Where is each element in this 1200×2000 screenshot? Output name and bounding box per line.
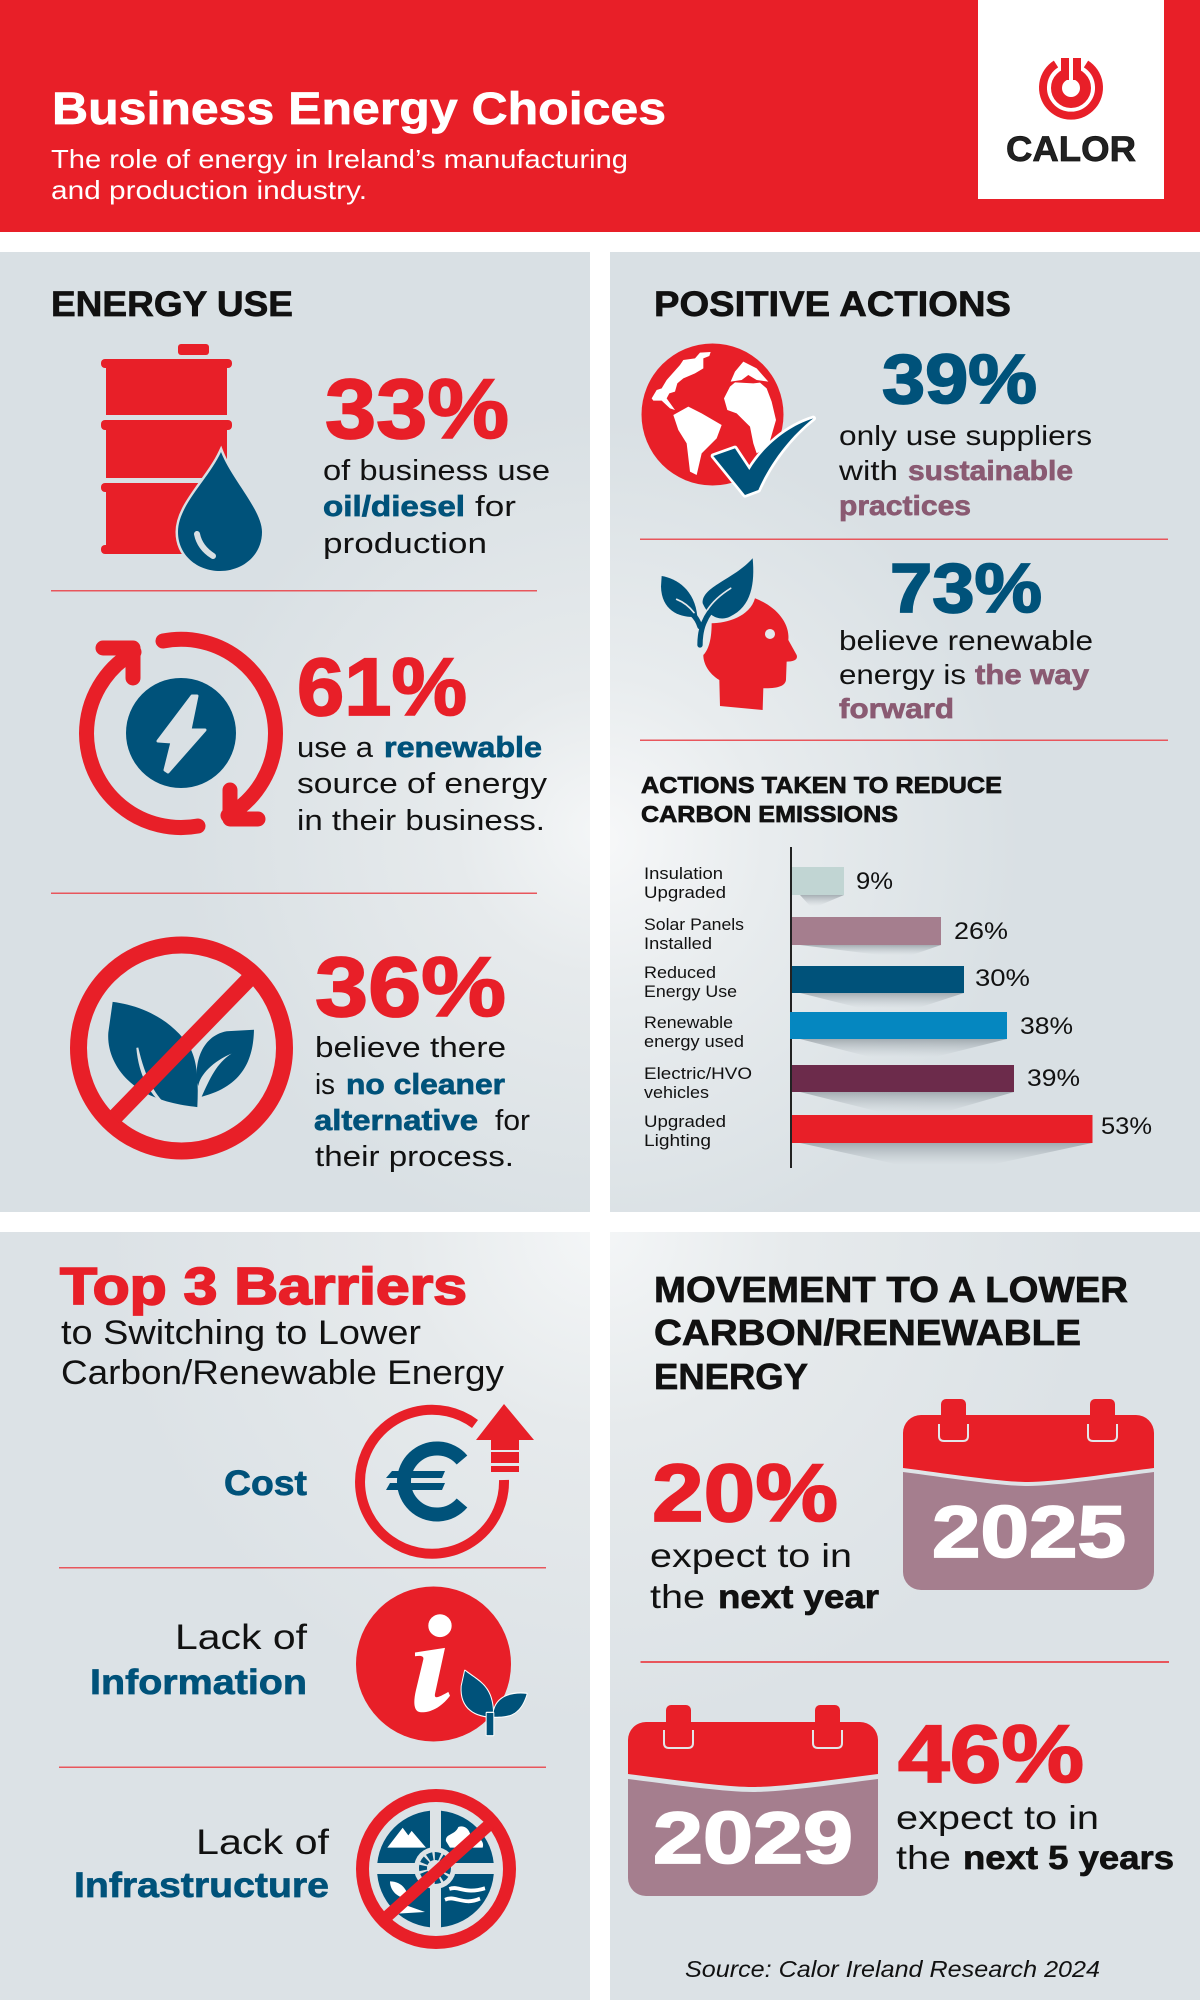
bar: reduced energy use 30%: Energy Use: [644, 982, 737, 1001]
stat: 46% next 5 years: [896, 1709, 1174, 1876]
bar: electric/HVO vehicles 39%: 39%: [1027, 1065, 1080, 1092]
stat: 36% no cleaner alternative: 36%: [315, 940, 506, 1034]
barrier: lack of infrastructure: Lack of: [196, 1823, 329, 1862]
stat: 36% no cleaner alternative: is: [315, 1069, 335, 1101]
stat: 46% next 5 years: expect to in: [896, 1799, 1099, 1836]
heading: positive actions: POSITIVE ACTIONS: [654, 285, 1011, 324]
heading: actions taken to reduce carbon emissions: [641, 772, 1002, 827]
logo: Calor: CALOR: [1006, 130, 1136, 169]
bar: insulation upgraded 9%: [644, 864, 893, 902]
stat: 61% renewable: 61%: [297, 642, 467, 733]
bar: upgraded lighting 53%: Lighting: [644, 1131, 711, 1150]
stat: 33% oil/diesel: production: [323, 528, 487, 560]
bar: reduced energy use 30%: [644, 963, 1030, 1001]
bar: insulation upgraded 9%: Upgraded: [644, 883, 726, 902]
stat: 36% no cleaner alternative: for: [495, 1105, 530, 1137]
bar: electric/HVO vehicles 39%: [644, 1064, 1080, 1102]
bar: insulation upgraded 9%: Insulation: [644, 864, 723, 883]
stat: 39% suppliers: sustainable: [908, 455, 1073, 486]
bar: upgraded lighting 53%: Upgraded: [644, 1112, 726, 1131]
heading: top 3 barriers: Carbon/Renewable Energy: [61, 1354, 504, 1392]
stat: 39% suppliers: practices: [839, 490, 971, 521]
bar: upgraded lighting 53%: 53%: [1101, 1113, 1152, 1140]
panel: movement to lower carbon: [610, 1232, 1200, 2000]
stat: 33% oil/diesel: for: [475, 491, 516, 523]
icon: head with leaves: [661, 558, 797, 710]
stat: 36% no cleaner alternative: no cleaner: [346, 1069, 505, 1101]
heading: top 3 barriers: [60, 1258, 504, 1392]
bar: solar panels installed 26%: Solar Panels: [644, 915, 744, 934]
stat: 46% next 5 years: 46%: [898, 1709, 1084, 1800]
subtitle: and production industry.: [51, 175, 367, 205]
panel: top 3 barriers: [0, 1232, 590, 2000]
icon: crossed-out leaves: [78, 945, 284, 1151]
stat: 33% oil/diesel: 33%: [325, 362, 509, 456]
stat: 33% oil/diesel: oil/diesel: [323, 491, 465, 523]
stat: 20% next year: expect to in: [650, 1537, 852, 1574]
stat: 36% no cleaner alternative: their process.: [315, 1141, 514, 1173]
stat: 73% renewable way forward: energy is: [839, 659, 966, 690]
logo: Calor: [978, 0, 1164, 199]
subtitle: The role of energy in Ireland’s manufacturing: [51, 144, 628, 174]
stat: 46% next 5 years: the: [896, 1839, 951, 1876]
panel: energy use: [0, 252, 590, 1212]
icon: calendar 2029: [628, 1705, 878, 1896]
stat: 61% renewable: [297, 642, 548, 837]
icon: euro with up arrow: [360, 1404, 534, 1554]
barrier: lack of information: Information: [90, 1663, 307, 1702]
bar: solar panels installed 26%: 26%: [954, 918, 1008, 945]
subtitle: [51, 144, 628, 205]
heading: top 3 barriers: to Switching to Lower: [61, 1314, 421, 1352]
bar: reduced energy use 30%: 30%: [975, 965, 1030, 992]
panel: positive actions: [610, 252, 1200, 1212]
stat: 61% renewable: use a: [297, 732, 374, 764]
stat: 73% renewable way forward: [839, 549, 1093, 724]
bar: renewable energy used 38%: 38%: [1020, 1013, 1073, 1040]
icon: globe with check mark: [642, 344, 813, 495]
stat: 36% no cleaner alternative: alternative: [314, 1105, 478, 1137]
icon: oil barrel with drop: [101, 344, 262, 571]
bar: solar panels installed 26%: [644, 915, 1008, 953]
barrier: lack of infrastructure: Infrastructure: [74, 1866, 329, 1905]
bar: upgraded lighting 53%: [644, 1112, 1152, 1150]
stat: 61% renewable: in their business.: [297, 805, 545, 837]
source note: Source: Calor Ireland Research 2024: [685, 1956, 1100, 1982]
stat: 73% renewable way forward: 73%: [890, 549, 1042, 627]
stat: 36% no cleaner alternative: believe there: [315, 1032, 506, 1064]
stat: 61% renewable: renewable: [384, 732, 542, 764]
icon: crossed-out infrastructure: [362, 1796, 510, 1942]
stat: 20% next year: [650, 1448, 879, 1615]
bar: reduced energy use 30%: Reduced: [644, 963, 716, 982]
heading: actions taken to reduce carbon emissions: ACTIONS TAKEN TO REDUCE: [641, 772, 1002, 798]
stat: 20% next year: the: [650, 1578, 705, 1615]
barrier: lack of information: [90, 1618, 307, 1702]
heading: movement to a lower carbon/renewable energy: [654, 1269, 1128, 1397]
bar: electric/HVO vehicles 39%: vehicles: [644, 1083, 709, 1102]
bar: solar panels installed 26%: Installed: [644, 934, 712, 953]
stat: 61% renewable: source of energy: [297, 768, 548, 800]
icon: calendar 2029: 2029: [653, 1798, 853, 1879]
stat: 46% next 5 years: next 5 years: [963, 1839, 1174, 1876]
bar: electric/HVO vehicles 39%: Electric/HVO: [644, 1064, 752, 1083]
barrier: cost: Cost: [224, 1464, 307, 1503]
stat: 73% renewable way forward: forward: [839, 693, 954, 724]
title: Business Energy Choices: [52, 83, 666, 134]
bar: renewable energy used 38%: energy used: [644, 1032, 744, 1051]
heading: movement to a lower carbon/renewable energy: CARBON/RENEWABLE: [654, 1312, 1081, 1353]
stat: 39% suppliers: with: [838, 455, 898, 486]
bar chart: actions taken: [644, 847, 1152, 1168]
bar: renewable energy used 38%: Renewable: [644, 1013, 733, 1032]
barrier: lack of information: Lack of: [175, 1618, 307, 1657]
barrier: lack of infrastructure: [74, 1823, 329, 1905]
stat: 73% renewable way forward: believe renewable: [839, 625, 1093, 656]
bar: renewable energy used 38%: [644, 1012, 1073, 1051]
stat: 20% next year: next year: [718, 1578, 879, 1615]
bar: insulation upgraded 9%: 9%: [856, 868, 893, 895]
stat: 39% suppliers: 39%: [882, 340, 1037, 418]
heading: actions taken to reduce carbon emissions: CARBON EMISSIONS: [641, 801, 898, 827]
stat: 20% next year: 20%: [652, 1448, 838, 1539]
icon: information with leaf: [356, 1586, 527, 1742]
icon: calendar 2025: 2025: [932, 1492, 1126, 1573]
heading: movement to a lower carbon/renewable energy: ENERGY: [654, 1356, 808, 1397]
header banner: [0, 0, 1200, 232]
heading: top 3 barriers: Top 3 Barriers: [60, 1258, 467, 1316]
stat: 39% suppliers: [838, 340, 1092, 521]
stat: 39% suppliers: only use suppliers: [839, 420, 1092, 451]
icon: calendar 2025: [903, 1399, 1154, 1590]
heading: energy use: ENERGY USE: [51, 285, 293, 324]
heading: movement to a lower carbon/renewable energy: MOVEMENT TO A LOWER: [654, 1269, 1128, 1310]
icon: renewable cycle with bolt: [86, 639, 276, 828]
stat: 36% no cleaner alternative: [314, 940, 530, 1173]
stat: 73% renewable way forward: the way: [975, 659, 1089, 690]
stat: 33% oil/diesel: of business use: [323, 455, 550, 487]
stat: 33% oil/diesel: [323, 362, 550, 560]
